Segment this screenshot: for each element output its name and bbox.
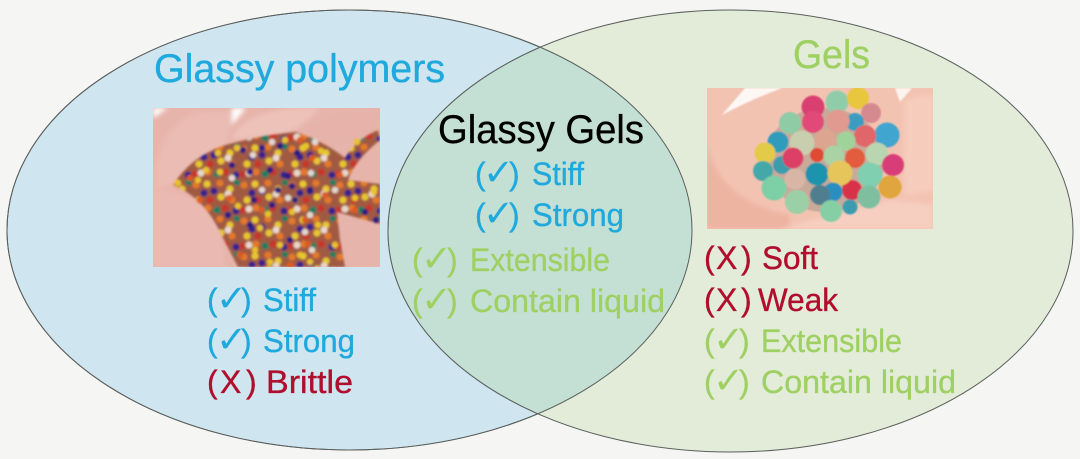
item: contain liquid: ) <box>447 283 458 319</box>
photo: large gel beads in palms <box>707 87 933 229</box>
item: stiff: ( <box>475 156 486 192</box>
item: stiff: ✓ <box>216 277 247 320</box>
item: soft: ) <box>741 240 752 276</box>
item: strong: ✓ <box>216 318 247 361</box>
item: stiff: ) <box>509 156 520 192</box>
list: glassy gels properties <box>412 151 665 321</box>
item: contain liquid <box>412 278 665 321</box>
item: soft: ( <box>704 240 715 276</box>
bead pile <box>173 130 380 267</box>
item: brittle: ( <box>207 364 218 400</box>
venn circle: glassy polymers <box>7 10 692 450</box>
item: strong: ( <box>207 323 218 359</box>
item: stiff: ✓ <box>483 151 514 194</box>
item: strong <box>475 192 624 235</box>
item: soft: Soft <box>762 240 818 276</box>
item: extensible: ✓ <box>713 318 744 361</box>
item: strong: ✓ <box>483 192 514 235</box>
item: stiff: Stiff <box>532 156 584 192</box>
item: weak: ) <box>741 282 752 318</box>
item: extensible: ✓ <box>421 237 452 280</box>
item: stiff <box>475 151 584 194</box>
item: stiff <box>207 277 316 320</box>
item: extensible: ( <box>704 323 715 359</box>
item: contain liquid: ✓ <box>421 278 452 321</box>
heading: gels: Gels <box>793 33 870 77</box>
item: contain liquid: ✓ <box>713 359 744 402</box>
heading: glassy gels: Glassy Gels <box>438 108 644 152</box>
list: glassy polymers properties <box>207 277 355 400</box>
item: brittle <box>207 364 353 400</box>
item: extensible: ) <box>447 242 458 278</box>
item: strong: ( <box>475 197 486 233</box>
item: extensible: ( <box>412 242 423 278</box>
item: extensible <box>412 237 610 280</box>
item: soft <box>704 240 818 276</box>
item: weak: Weak <box>758 282 839 318</box>
item: weak <box>704 282 839 318</box>
item: strong: ) <box>241 323 252 359</box>
item: extensible <box>704 318 902 361</box>
photo: tiny polymer beads in hand <box>153 108 380 267</box>
item: strong: Strong <box>263 323 355 359</box>
heading: glassy polymers: Glassy polymers <box>154 47 445 91</box>
item: contain liquid: Contain liquid <box>761 364 956 400</box>
item: weak: ( <box>704 282 715 318</box>
item: soft: X <box>716 240 737 276</box>
item: contain liquid: ( <box>412 283 423 319</box>
venn overlap: glassy gels <box>388 47 692 414</box>
item: extensible: Extensible <box>761 323 902 359</box>
item: extensible: ) <box>739 323 750 359</box>
outline of glassy polymers circle over overlap <box>7 10 692 450</box>
gel beads <box>753 87 904 222</box>
item: brittle: Brittle <box>266 364 353 400</box>
item: stiff: ( <box>207 282 218 318</box>
item: stiff: ) <box>241 282 252 318</box>
item: strong: Strong <box>532 197 624 233</box>
list: gels properties <box>704 240 956 402</box>
item: strong <box>207 318 355 361</box>
item: contain liquid: ) <box>739 364 750 400</box>
venn circle: gels <box>388 10 1073 452</box>
item: contain liquid: ( <box>704 364 715 400</box>
item: contain liquid <box>704 359 956 402</box>
item: extensible: Extensible <box>470 242 610 278</box>
item: brittle: ) <box>246 364 257 400</box>
item: brittle: X <box>220 364 241 400</box>
item: contain liquid: Contain liquid <box>470 283 665 319</box>
item: strong: ) <box>509 197 520 233</box>
item: weak: X <box>716 282 737 318</box>
item: stiff: Stiff <box>263 282 316 318</box>
